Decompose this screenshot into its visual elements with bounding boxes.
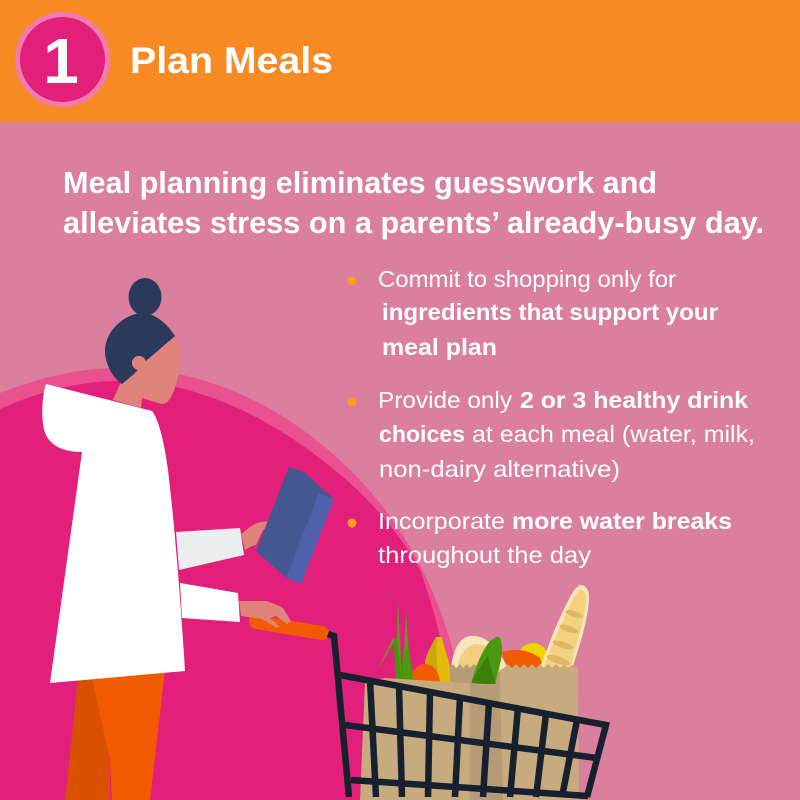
small orange: [410, 664, 440, 684]
left paper bag: [360, 678, 503, 800]
bullet 3: more water breaks: [512, 508, 732, 534]
intro statement: alleviates stress on a parents’ already-busy day.: [63, 205, 764, 240]
coat: [42, 384, 185, 683]
bullet 2: at each meal (water, milk,: [472, 421, 755, 447]
bullet 1: [348, 266, 718, 360]
decorative pink circle behind the shopper: [0, 368, 470, 800]
number badge: 1: [43, 25, 79, 97]
intro statement: Meal planning eliminates guesswork and: [63, 165, 657, 200]
banana: [425, 637, 454, 684]
heading: Plan Meals: [130, 40, 333, 81]
cart handle: [256, 622, 322, 633]
shopping cart frame: [328, 634, 606, 797]
bullet list: [348, 266, 755, 568]
groceries in bags: [360, 585, 589, 800]
bullet 3: [348, 508, 732, 568]
paper wrap: [450, 673, 472, 684]
baguette: [539, 585, 589, 669]
back of left bag: [450, 664, 500, 685]
ear: [132, 356, 146, 370]
right paper bag: [500, 664, 579, 800]
tablet: [256, 467, 334, 584]
green onions: [377, 598, 414, 684]
neck and face: [113, 336, 181, 408]
upper sleeve: [176, 528, 244, 570]
bullet 2: [348, 387, 755, 482]
bullet 2: non-dairy alternative): [379, 456, 620, 482]
round bread: [451, 636, 508, 672]
header band: [0, 0, 800, 122]
lower sleeve: [180, 583, 240, 622]
bullet 2: Provide only: [378, 387, 513, 413]
bullet 1: meal plan: [382, 334, 497, 360]
bullet 2: 2 or 3 healthy drink: [520, 387, 748, 413]
cucumber: [471, 637, 502, 684]
bullet 1: ingredients that support your: [382, 299, 718, 325]
lower hand: [239, 601, 291, 628]
lemon: [518, 643, 548, 673]
large orange: [502, 650, 546, 672]
intro statement: [63, 165, 764, 240]
upper hand: [241, 521, 278, 550]
legs: [65, 670, 165, 800]
bullet 1: Commit to shopping only for: [378, 266, 676, 292]
bullet 2: choices: [379, 421, 465, 447]
shopper: [42, 278, 334, 800]
bullet 3: Incorporate: [378, 508, 505, 534]
number badge: [15, 12, 110, 107]
bullet 3: throughout the day: [378, 542, 592, 568]
hair: [105, 278, 175, 384]
